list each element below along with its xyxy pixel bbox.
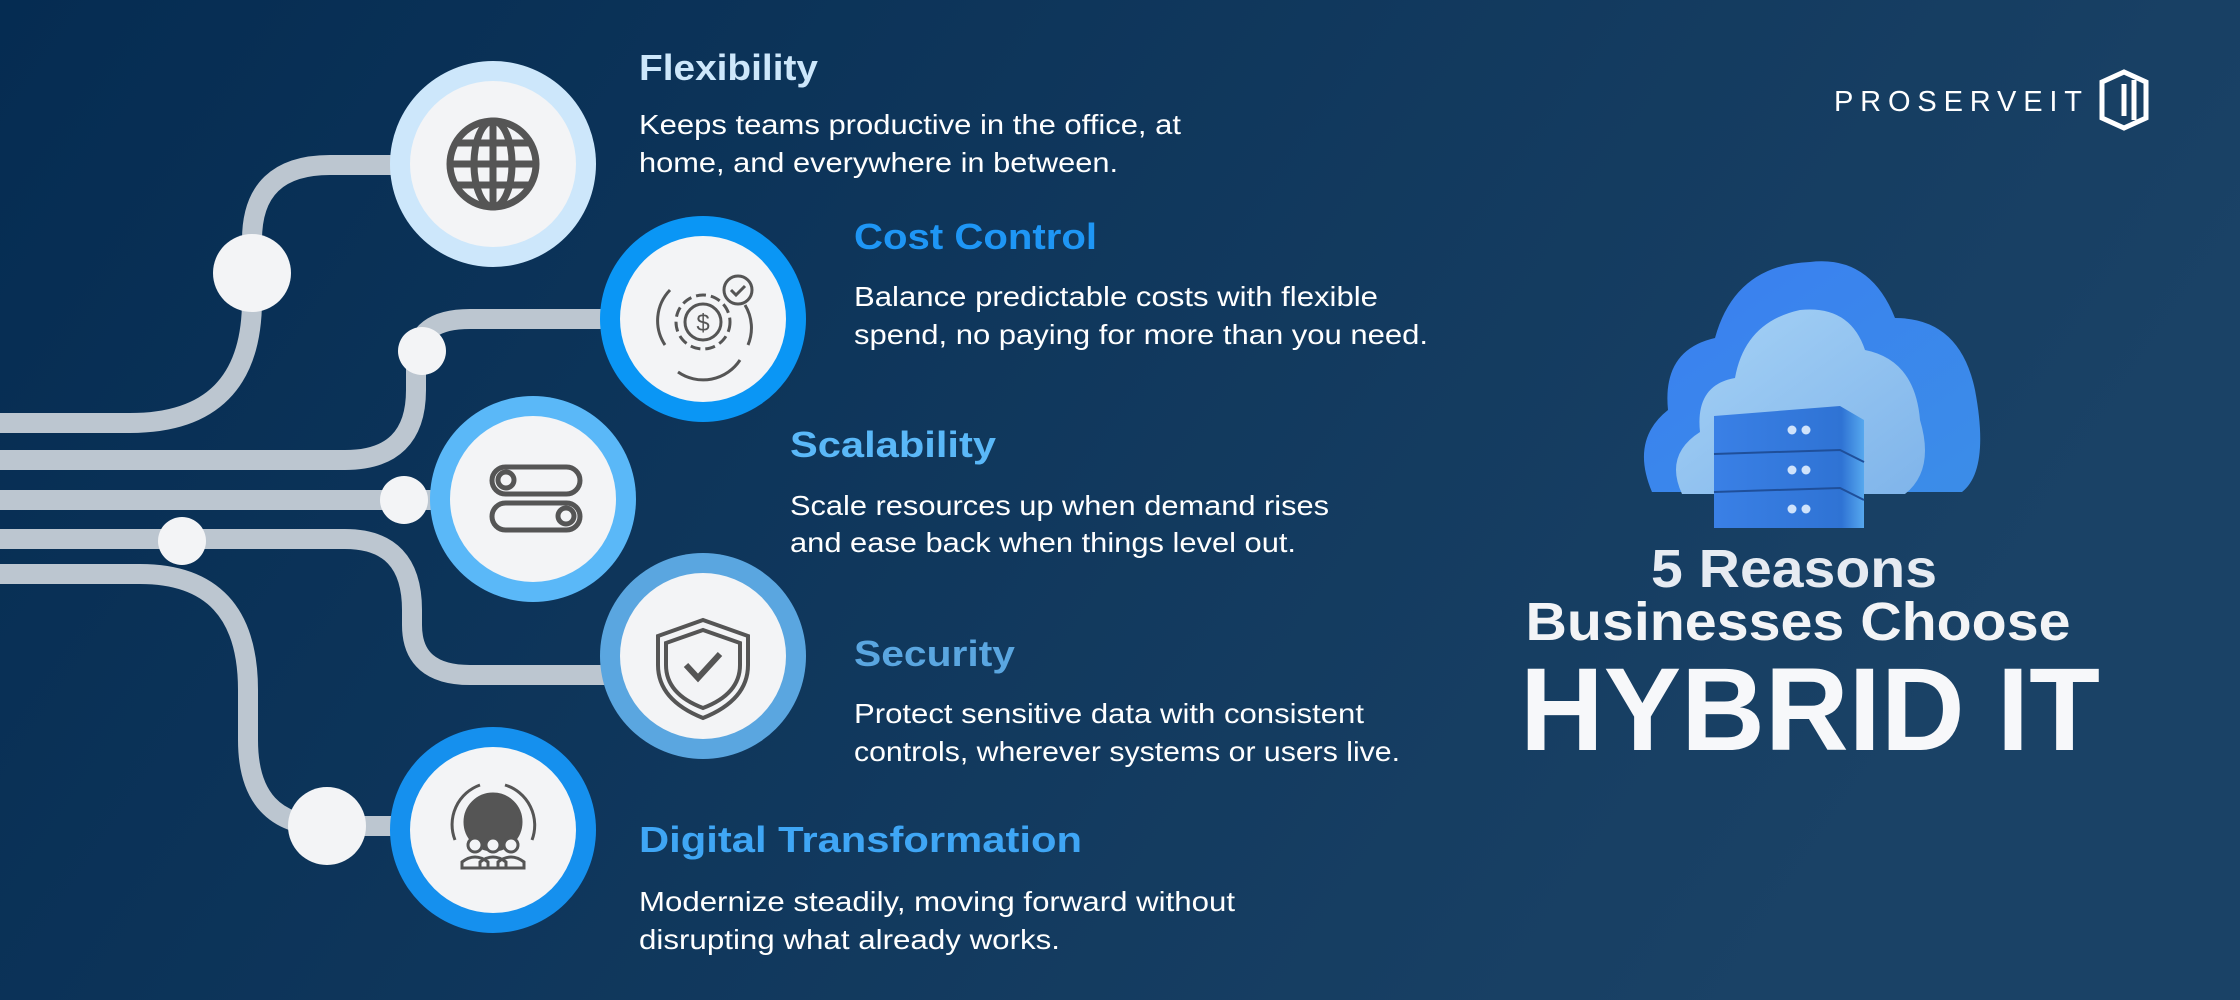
icon: toggles bbox=[492, 467, 580, 530]
text: cost control: spend, no paying for more than you need. bbox=[854, 319, 1428, 350]
icon: logo mark bbox=[2102, 72, 2146, 128]
text: flexibility: Flexibility bbox=[639, 47, 818, 88]
title: HYBRID IT bbox=[1520, 644, 2100, 776]
title: 5 Reasons bbox=[1651, 539, 1937, 599]
circle: security bbox=[600, 553, 806, 759]
icon: gear dollar bbox=[658, 276, 752, 380]
circle: digital transformation bbox=[390, 727, 596, 933]
text: flexibility: Keeps teams productive in the office, at bbox=[639, 109, 1181, 140]
text: flexibility bbox=[639, 47, 1181, 178]
text: flexibility: home, and everywhere in between. bbox=[639, 147, 1118, 178]
circle: scalability bbox=[430, 396, 636, 602]
title bbox=[1520, 539, 2100, 776]
text: cost control: Balance predictable costs with flexible bbox=[854, 281, 1378, 312]
text: digital transformation: Digital Transformation bbox=[639, 819, 1082, 860]
text: scalability: Scalability bbox=[790, 424, 996, 465]
text: scalability: and ease back when things level out. bbox=[790, 527, 1296, 558]
circle: cost control bbox=[600, 216, 806, 422]
text: security: Security bbox=[854, 633, 1015, 674]
text: digital transformation bbox=[639, 819, 1235, 955]
icon: globe people bbox=[452, 785, 535, 868]
text: security: controls, wherever systems or users live. bbox=[854, 736, 1400, 767]
icon: gear dollar: $ bbox=[696, 310, 710, 337]
text: digital transformation: Modernize steadily, moving forward without bbox=[639, 886, 1235, 917]
circle: flexibility globe bbox=[390, 61, 596, 267]
icon: shield bbox=[658, 620, 748, 718]
text: cost control: Cost Control bbox=[854, 216, 1097, 257]
text: digital transformation: disrupting what already works. bbox=[639, 924, 1060, 955]
title: Businesses Choose bbox=[1526, 592, 2070, 652]
text: scalability: Scale resources up when demand rises bbox=[790, 490, 1329, 521]
text: cost control bbox=[854, 216, 1428, 350]
illustration: cloud with server bbox=[1644, 261, 1980, 528]
text: security: Protect sensitive data with consistent bbox=[854, 698, 1364, 729]
logo: PROSERVEIT bbox=[1834, 86, 2082, 118]
icon: globe bbox=[450, 121, 536, 207]
text: security bbox=[854, 633, 1400, 767]
connector nodes bbox=[158, 234, 446, 865]
logo bbox=[1834, 72, 2146, 128]
connector lines bbox=[0, 165, 620, 826]
text: scalability bbox=[790, 424, 1329, 558]
